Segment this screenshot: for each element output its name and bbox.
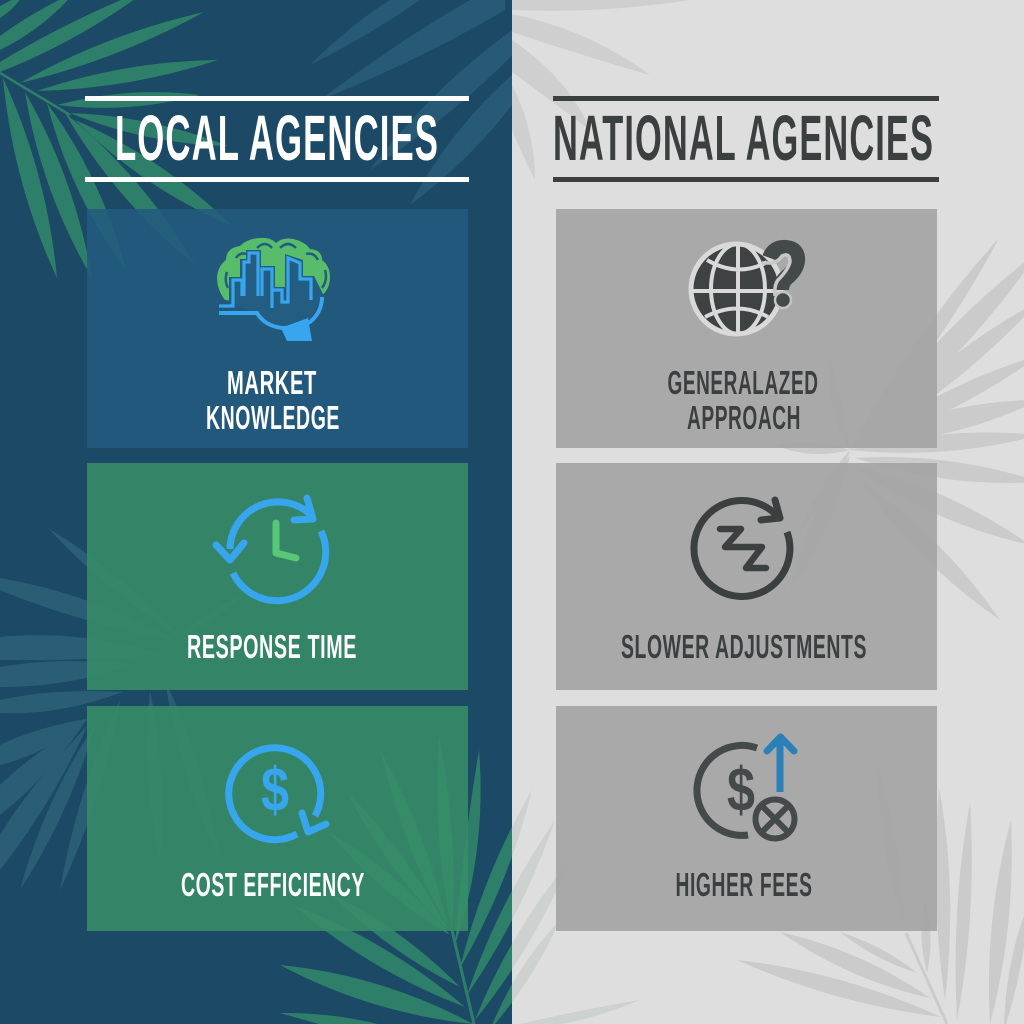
panel: slower adjustments (556, 463, 937, 690)
heading: local agencies: LOCAL AGENCIES (115, 102, 439, 174)
icon: dollar with circular arrow (229, 748, 326, 840)
label: generalazed approach: GENERALAZED (668, 364, 818, 401)
panel: generalized approach (556, 209, 937, 448)
panel: cost efficiency (87, 706, 468, 931)
panel: local agencies background (0, 0, 512, 1024)
heading: local agencies (85, 96, 469, 182)
palm leaf: top left of national side (512, 0, 690, 180)
palm leaf: bottom right national side (737, 765, 1024, 1024)
icon: dollar with up arrow and x: $ (727, 756, 755, 825)
icon: dollar with up arrow and x (697, 737, 794, 838)
panel: higher fees (556, 706, 937, 931)
palm leaf: top right of local side (310, 0, 512, 205)
label: response time: RESPONSE TIME (187, 628, 357, 665)
panel: market knowledge: KNOWLEDGE (206, 399, 340, 436)
palm leaf: top left green (0, 0, 232, 278)
label: higher fees: HIGHER FEES (676, 866, 812, 903)
label: cost efficiency: COST EFFICIENCY (181, 866, 365, 903)
palm leaf: bottom right green on local side (280, 736, 570, 1024)
icon: brain and city (217, 238, 330, 341)
panel: generalized approach: APPROACH (687, 399, 801, 436)
palm leaf: right national side (775, 238, 1024, 620)
icon: globe with question mark (691, 244, 797, 334)
palm leaf: lower left dim (0, 528, 245, 890)
label: market knowledge: MARKET (227, 364, 317, 401)
panel: market knowledge (87, 209, 468, 448)
icon: sleepy circular arrow (694, 500, 790, 596)
icon: dollar with circular arrow: $ (261, 756, 289, 825)
icon: clock with arrows (216, 498, 326, 601)
palm leaf: green frond tips on national side (512, 792, 639, 1024)
panel: national agencies background (512, 0, 1024, 1024)
panel: response time (87, 463, 468, 690)
